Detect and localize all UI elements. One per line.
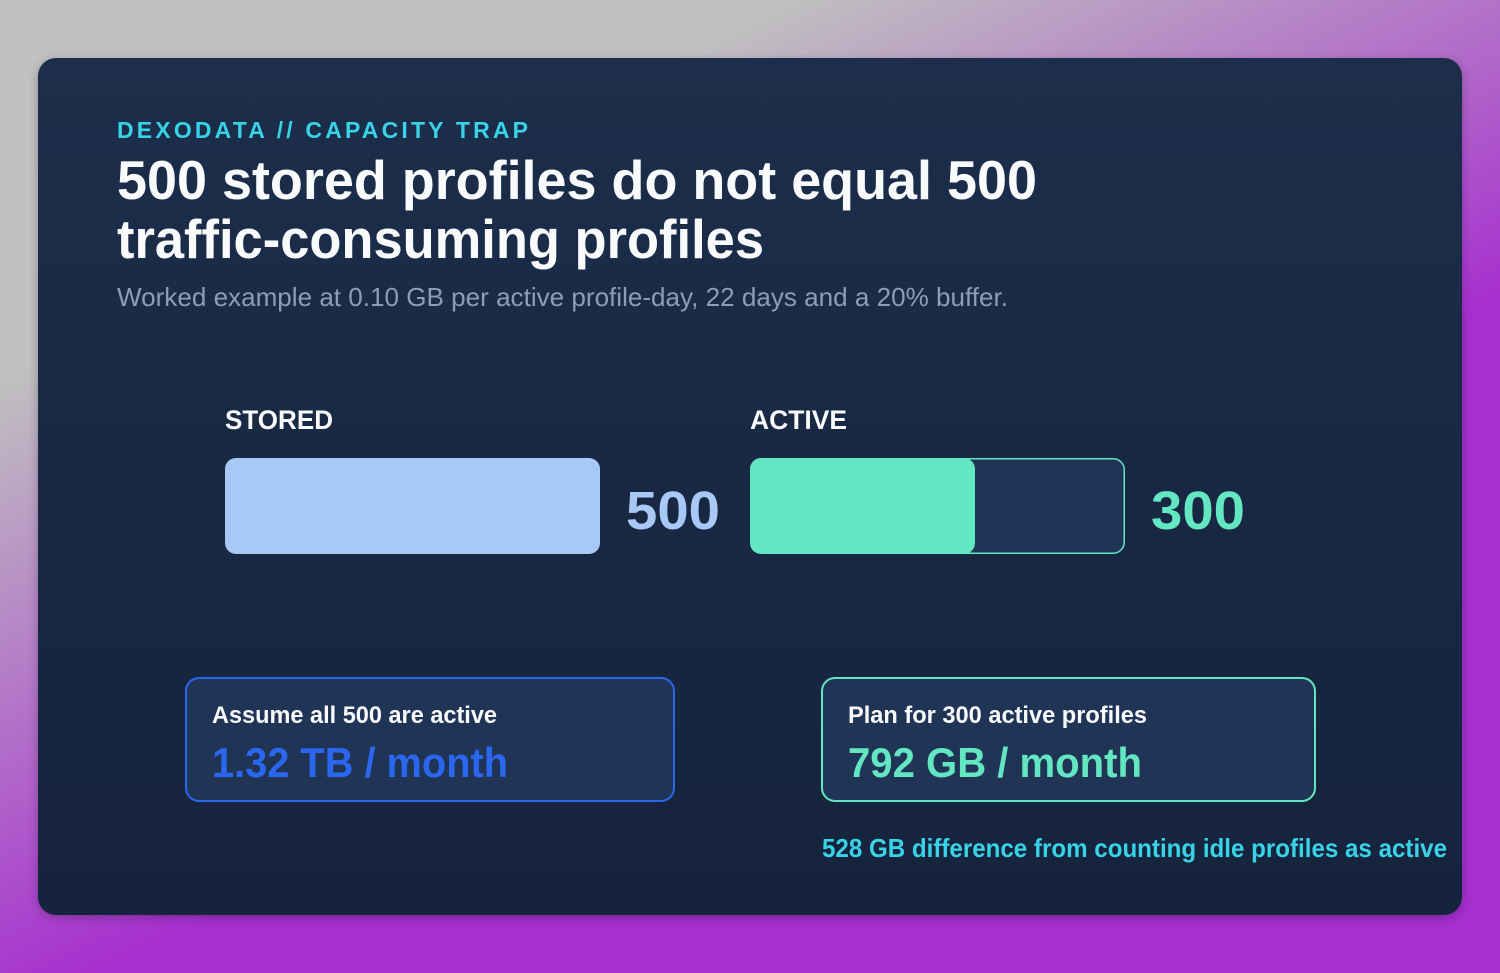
stored bar group [225, 405, 720, 554]
stored bar [225, 458, 600, 554]
eyebrow label: DEXODATA // CAPACITY TRAP [117, 117, 528, 143]
active bar group [750, 405, 1245, 554]
active label: ACTIVE [750, 405, 847, 435]
header block [117, 117, 1037, 312]
stored value: 500 [626, 481, 720, 541]
callout: assume all active [186, 678, 674, 801]
stored label: STORED [225, 405, 333, 435]
callout: plan for active [822, 678, 1315, 801]
active bar fill [750, 458, 975, 554]
callout value: 792 GB / month [848, 739, 1142, 786]
callout label: Assume all 500 are active [212, 702, 497, 729]
title [117, 149, 1037, 270]
difference note: 528 GB difference from counting idle profiles as active [822, 833, 1447, 863]
callout label: Plan for 300 active profiles [848, 702, 1147, 729]
title: 500 stored profiles do not equal 500 [117, 149, 1037, 211]
active value: 300 [1151, 481, 1245, 541]
callout box [186, 678, 674, 801]
title: traffic-consuming profiles [117, 208, 764, 270]
callout value: 1.32 TB / month [212, 739, 508, 786]
active bar track [751, 459, 1124, 553]
subtitle: Worked example at 0.10 GB per active profile-day, 22 days and a 20% buffer. [117, 282, 1008, 312]
callout box [822, 678, 1315, 801]
